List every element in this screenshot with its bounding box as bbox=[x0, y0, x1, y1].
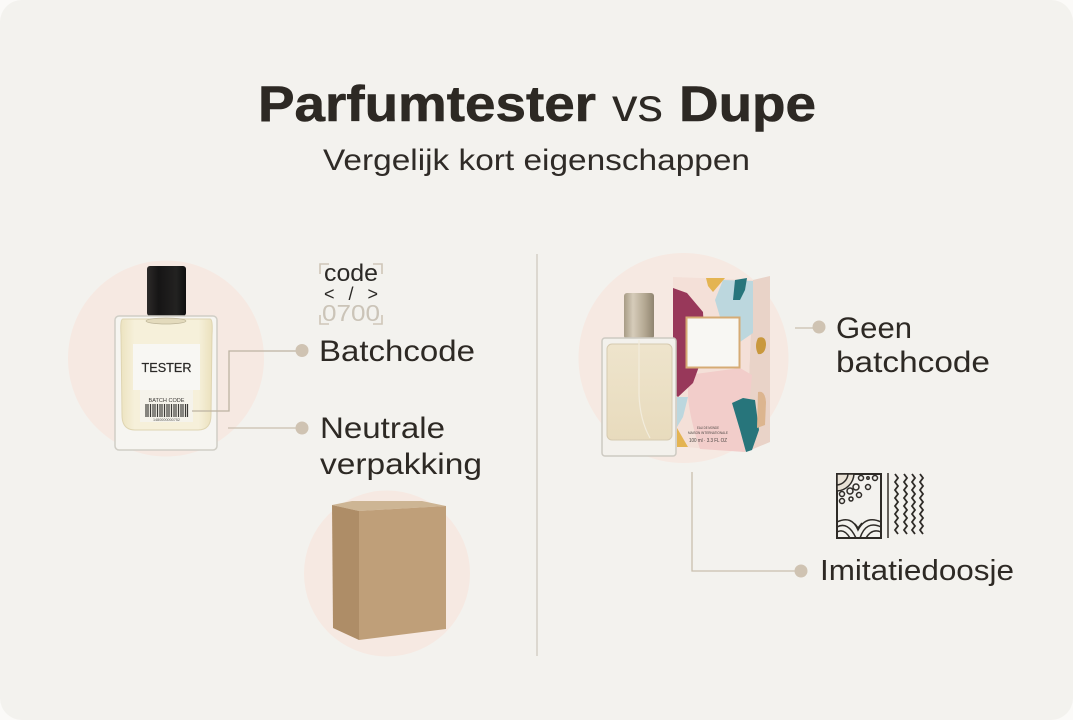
icon: imitation box: 100 ml · 3.3 FL OZ bbox=[689, 438, 727, 444]
barcode bbox=[146, 404, 188, 417]
title bbox=[258, 76, 816, 132]
label: neutrale verpakking: Neutrale bbox=[320, 412, 445, 445]
icon: tester bottle: 1480000000752 bbox=[153, 418, 180, 422]
label: batchcode: Batchcode bbox=[319, 335, 475, 368]
batch code label: BATCH CODE bbox=[148, 398, 185, 404]
dupe circle bbox=[578, 253, 788, 463]
panel: dupe bbox=[578, 253, 1014, 587]
connector: batchcode bbox=[192, 344, 308, 411]
divider bbox=[536, 254, 538, 656]
icon: imitation box: MAISON INTERNATIONALE bbox=[688, 431, 729, 435]
label: imitatiedoosje: Imitatiedoosje bbox=[820, 555, 1014, 587]
label: neutrale verpakking: verpakking bbox=[320, 448, 482, 481]
panel: parfumtester bbox=[68, 260, 482, 656]
subtitle: Vergelijk kort eigenschappen bbox=[323, 144, 750, 177]
tester circle bbox=[68, 260, 264, 456]
icon: imitation box bbox=[673, 276, 770, 452]
icon: code: < / > bbox=[324, 284, 378, 304]
icon: code bbox=[320, 260, 382, 326]
connector: imitatiedoosje bbox=[692, 472, 808, 578]
icon: imitation box: EAU DE MONDE bbox=[697, 425, 719, 430]
title: Parfumtester bbox=[258, 76, 596, 132]
connector: geen batchcode bbox=[795, 320, 826, 334]
connector: neutrale verpakking bbox=[228, 422, 308, 434]
label: geen batchcode: batchcode bbox=[836, 346, 990, 379]
title: Dupe bbox=[679, 76, 816, 132]
tester label: TESTER bbox=[142, 361, 192, 375]
icon: code: 0700 bbox=[322, 300, 380, 326]
icon: dupe bottle bbox=[602, 293, 676, 456]
icon: tester bottle bbox=[115, 266, 217, 450]
icon: code: code bbox=[324, 260, 378, 287]
icon: cardboard box bbox=[332, 501, 446, 640]
icon: pattern bbox=[837, 473, 923, 538]
title: vs bbox=[612, 79, 663, 131]
box circle bbox=[304, 490, 470, 656]
label: geen batchcode: Geen bbox=[836, 312, 912, 345]
